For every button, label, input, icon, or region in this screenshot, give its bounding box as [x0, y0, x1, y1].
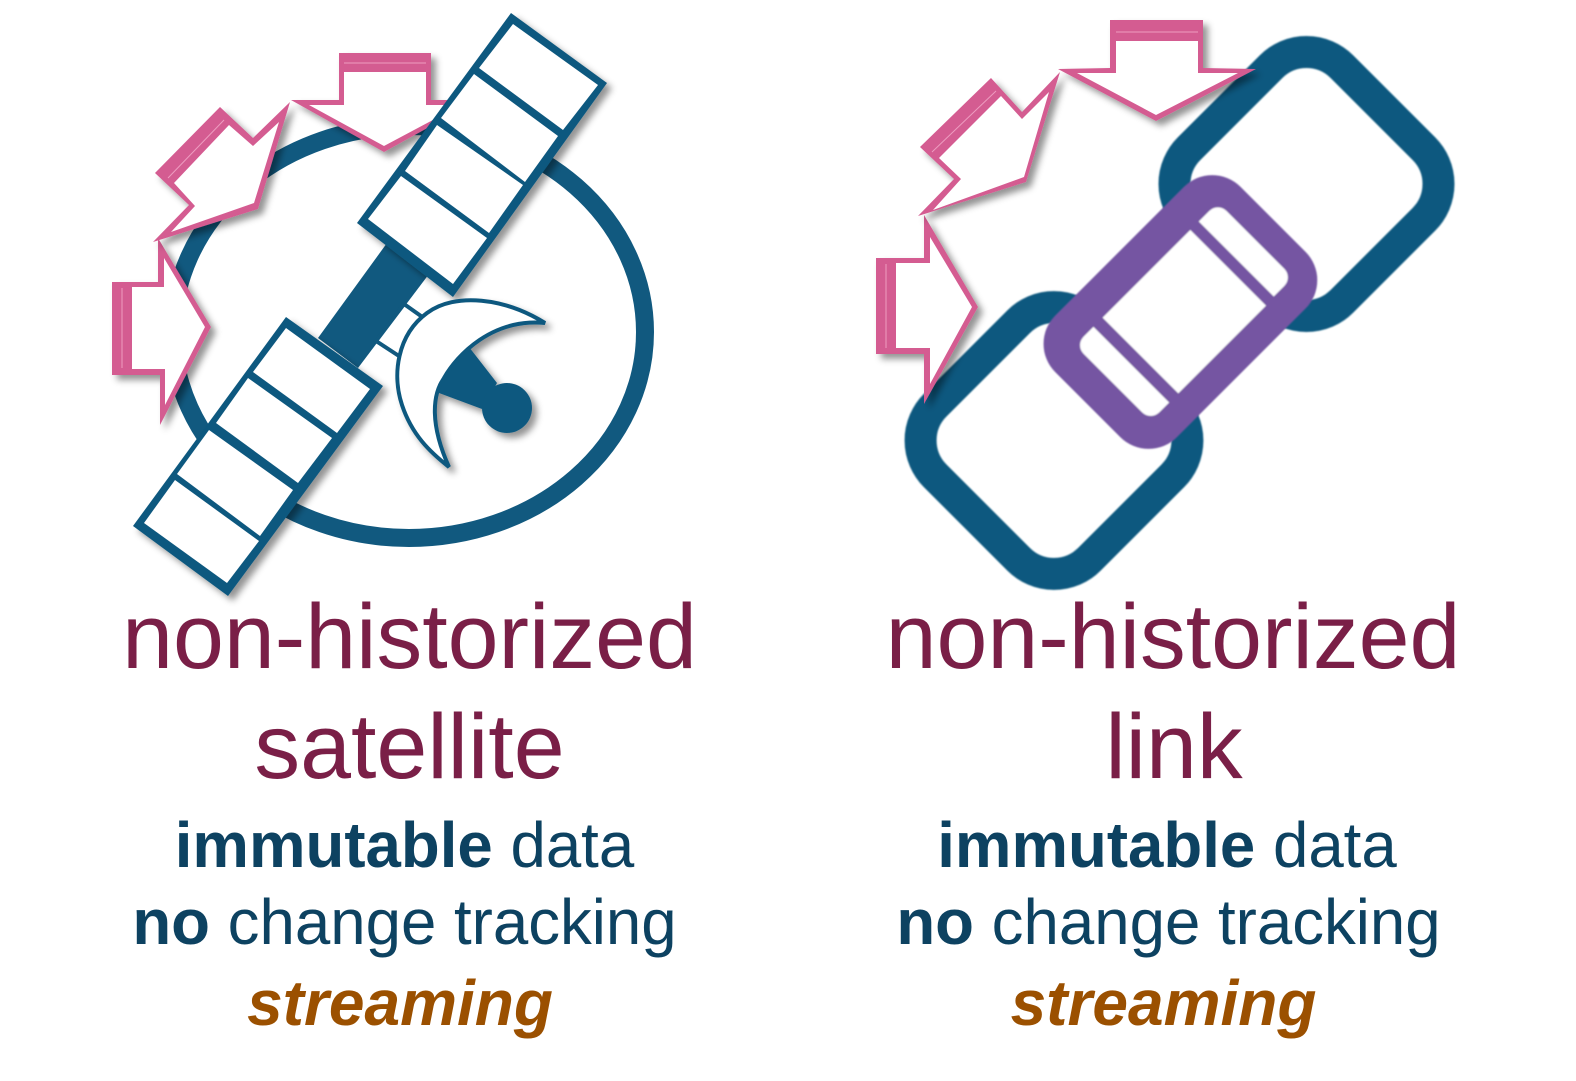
text: immutable data: immutable data [175, 810, 635, 881]
icon: lower solar panel [133, 317, 383, 596]
icon: satellite orbit ring [173, 126, 645, 538]
icon: inbound arrow top [291, 53, 478, 152]
text: immutable data: immutable data [937, 810, 1397, 881]
icon: upper chain link [1154, 31, 1459, 337]
heading: non-historized link: link [1105, 696, 1243, 798]
icon: satellite dish connector [376, 304, 428, 356]
icon: inbound arrow diagonal [918, 72, 1060, 216]
heading: non-historized link: non-historized [886, 586, 1460, 688]
icon: satellite body arm [318, 243, 429, 368]
text: no change tracking: no change tracking [896, 887, 1441, 958]
panel: non-historized link [876, 20, 1460, 1039]
text: streaming: streaming [1011, 967, 1316, 1039]
icon: inbound arrow left [112, 238, 211, 425]
icon: satellite dish [397, 300, 545, 467]
heading: non-historized satellite: non-historized [122, 586, 697, 688]
icon: inbound arrow left [876, 215, 978, 404]
text: no change tracking: no change tracking [132, 887, 677, 958]
icon: inbound arrow diagonal [153, 102, 290, 242]
panel: non-historized satellite [112, 13, 697, 1039]
icon: upper solar panel [357, 13, 607, 297]
icon: lower chain link [900, 286, 1208, 595]
icon: inbound arrow top [1058, 20, 1256, 121]
text: streaming: streaming [247, 967, 553, 1039]
icon: purple connecting link [1027, 159, 1334, 465]
heading: non-historized satellite: satellite [254, 696, 565, 798]
